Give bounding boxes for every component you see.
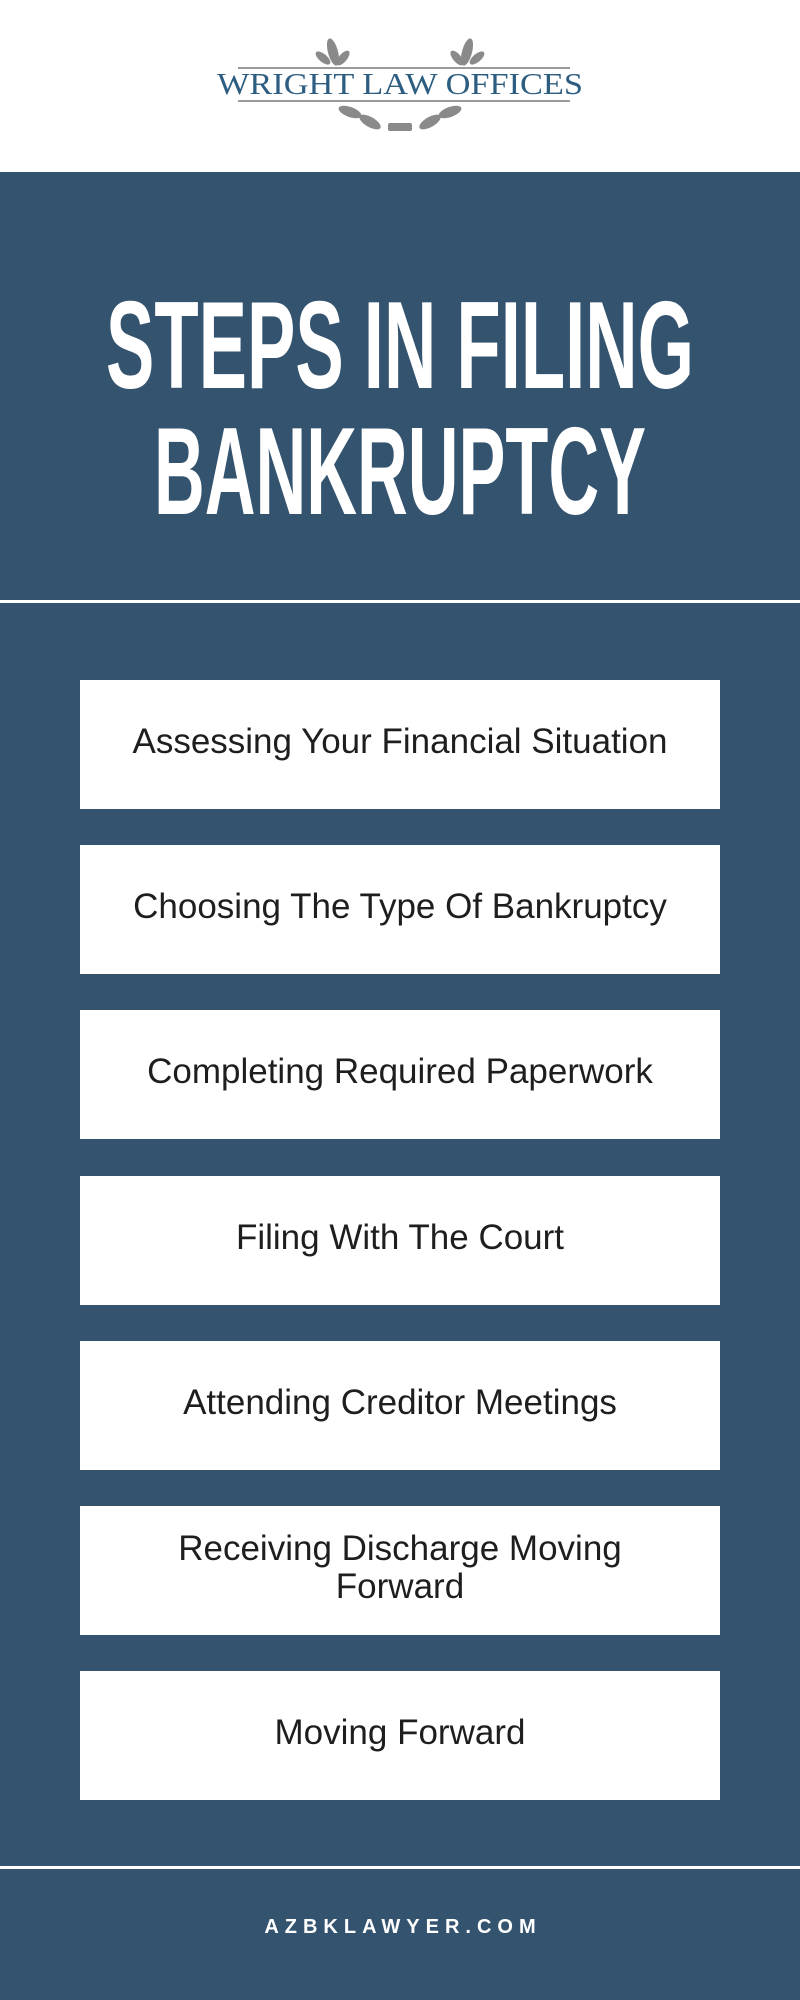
- step 6: Forward: [336, 1566, 464, 1606]
- step 3: [80, 1010, 720, 1139]
- laurel top right: [448, 37, 486, 67]
- step 4: Filing With The Court: [236, 1218, 564, 1256]
- header: logo: [0, 0, 800, 172]
- step 6: [80, 1506, 720, 1635]
- footer url: AZBKLAWYER.COM: [264, 1916, 542, 1938]
- step 7: [80, 1671, 720, 1800]
- step 1: Assessing Your Financial Situation: [132, 722, 668, 760]
- title: [106, 277, 694, 530]
- step 2: Choosing The Type Of Bankruptcy: [133, 886, 667, 926]
- step 2: [80, 845, 720, 974]
- logo text: WRIGHT LAW OFFICES: [217, 66, 583, 101]
- step 1: [80, 680, 720, 809]
- step 5: [80, 1341, 720, 1470]
- step 7: Moving Forward: [275, 1712, 525, 1752]
- step 5: Attending Creditor Meetings: [183, 1382, 617, 1422]
- step 3: Completing Required Paperwork: [147, 1052, 653, 1090]
- laurel bottom: [337, 103, 463, 132]
- step 4: [80, 1176, 720, 1305]
- step 6: Receiving Discharge Moving: [178, 1528, 622, 1568]
- laurel top left: [314, 37, 352, 67]
